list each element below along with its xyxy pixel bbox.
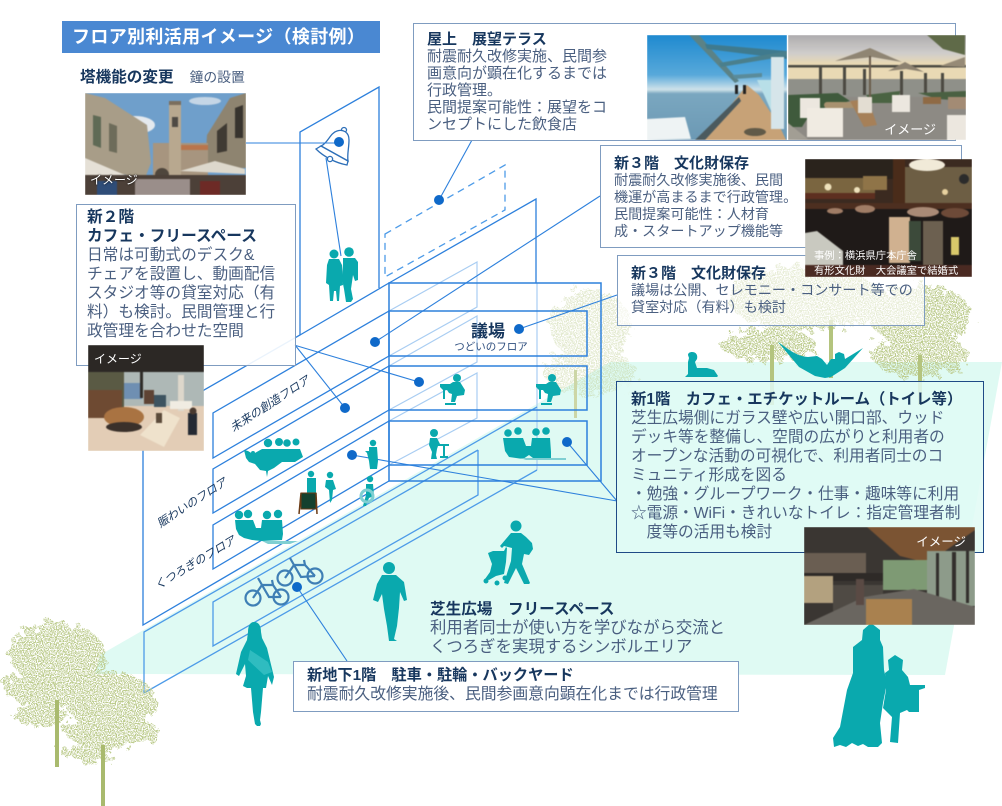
new 2nd floor text: 料）も検討。民間管理と行: [87, 304, 275, 321]
photo caption: イメージ: [90, 173, 138, 187]
assembly hall text: 新３階 文化財保存: [631, 265, 766, 282]
floor name labels: [152, 373, 313, 592]
silhouette: reclining person: [685, 352, 718, 377]
silhouette: person with stroller: [484, 520, 533, 586]
silhouettes: group on relaxing floor: [235, 510, 298, 544]
trees: right side: [544, 266, 972, 418]
new 1st floor text: ミュニティ形成を図る: [631, 467, 787, 484]
rooftop text: 画意向が顕在化するまでは: [427, 65, 607, 82]
panel: rooftop terrace: [413, 23, 956, 141]
lawn plaza text: 利用者同士が使い方を学びながら交流と: [430, 619, 725, 637]
floor name labels: 賑わいのフロア: [155, 475, 231, 530]
new 3rd floor text: [614, 155, 797, 239]
new 1st floor text: 芝生広場側にガラス壁や広い開口部、ウッド: [631, 410, 944, 427]
lawn plaza ground: [95, 362, 1002, 675]
rooftop text: 民間提案可能性：展望をコ: [427, 99, 607, 116]
bell icon: [316, 128, 349, 165]
new 3rd floor text: 機運が高まるまで行政管理。: [614, 189, 797, 205]
photo caption: [814, 250, 958, 276]
panel: new basement 1st floor: [293, 661, 739, 712]
photo caption: イメージ: [916, 535, 966, 549]
floor name labels: 未来の創造フロア: [228, 373, 313, 435]
roof terrace dashed outline: [385, 165, 505, 277]
rooftop text: 行政管理。: [427, 82, 502, 99]
silhouette: walking man: [373, 562, 407, 641]
floor slabs: [213, 311, 389, 569]
new 1st floor text: ☆電源・WiFi・きれいなトイレ：指定管理者制: [631, 505, 960, 522]
silhouette: mother and child with stroller: [833, 623, 925, 747]
new 1st floor text: ・勉強・グループワーク・仕事・趣味等に利用: [631, 486, 959, 503]
panel: new 1st floor cafe: [616, 381, 984, 553]
lawn plaza text: [430, 600, 725, 656]
assembly hall text: [631, 265, 913, 315]
new 1st floor text: 度等の活用も検討: [647, 524, 772, 541]
panel: new 3rd floor assembly hall: [617, 255, 925, 326]
panel: new 2nd floor: [76, 204, 296, 366]
chalkboard sign: [299, 493, 317, 514]
title bar: [62, 21, 380, 53]
basement level outline: [213, 450, 478, 646]
assembly hall label: [454, 322, 528, 353]
basement text: 新地下1階 駐車・駐輪・バックヤード: [307, 667, 574, 684]
silhouettes: group at table lower floor: [503, 427, 566, 460]
new 2nd floor text: [87, 208, 275, 340]
tower function heading: 塔機能の変更 鐘の設置: [80, 69, 245, 86]
new 3rd floor text: 新３階 文化財保存: [614, 155, 749, 172]
silhouette: person in hammock: [778, 342, 863, 378]
new 3rd floor text: 耐震耐久改修実施後、民間: [614, 172, 783, 188]
photo caption: イメージ: [94, 352, 142, 366]
lawn plaza text: 芝生広場 フリースペース: [430, 601, 614, 618]
new 2nd floor text: カフェ・フリースペース: [87, 228, 257, 245]
bicycles: [246, 558, 322, 606]
location dots: [292, 137, 572, 592]
new 1st floor text: [631, 390, 962, 541]
assembly hall text: 議場は公開、セレモニー・コンサート等での: [631, 282, 913, 298]
new 1st floor text: デッキ等を整備し、空間の広がりと利用者の: [631, 429, 945, 446]
rooftop text: 耐震耐久改修実施、民間参: [427, 48, 607, 65]
photo: glass observation deck: [647, 35, 787, 140]
new 1st floor text: オープンな活動の可視化で、利用者同士のコ: [631, 448, 943, 465]
assembly hall text: 貸室対応（有料）も検討: [631, 299, 786, 315]
new 2nd floor text: 新２階: [87, 209, 134, 226]
light back frames: [389, 262, 537, 470]
silhouettes: seated at desks upper floor: [440, 374, 561, 405]
trees: left side: [2, 623, 160, 806]
photo: tower street: [85, 93, 246, 195]
new 2nd floor text: チェアを設置し、動画配信: [87, 266, 275, 283]
floor name labels: くつろぎのフロア: [152, 533, 239, 592]
assembly hall label: 議場: [471, 322, 505, 341]
connector lines: [246, 140, 617, 661]
silhouettes: couple under bell: [326, 247, 358, 302]
photo caption: イメージ: [884, 122, 936, 137]
new 2nd floor text: 日常は可動式のデスク&: [87, 247, 254, 264]
new 2nd floor text: 政管理を合わせた空間: [87, 323, 244, 340]
silhouettes: seated at desk lower floor: [429, 429, 449, 459]
lawn plaza text: くつろぎを実現するシンボルエリア: [430, 638, 692, 656]
basement text: 耐震耐久改修実施後、民間参画意向顕在化までは行政管理: [307, 686, 718, 703]
new 3rd floor text: 成・スタートアップ機能等: [614, 223, 783, 239]
photo caption: 有形文化財 大会議室で結婚式: [814, 266, 958, 276]
title bar: フロア別利活用イメージ（検討例）: [72, 27, 365, 47]
plaza level outline: [144, 407, 537, 693]
front elevation: [389, 283, 601, 481]
new 3rd floor text: 民間提案可能性：人材育: [614, 206, 769, 222]
rooftop text: [427, 31, 607, 133]
basement text: [307, 666, 718, 703]
panel: new 3rd floor cultural asset: [600, 145, 962, 248]
photo: cafe interior: [804, 527, 975, 625]
assembly hall label: つどいのフロア: [454, 341, 528, 353]
silhouettes: waiter, guests and wheelchair: [307, 440, 378, 506]
photo: cafe free space: [88, 345, 204, 451]
rooftop text: ンセプトにした飲食店: [427, 116, 577, 133]
photo: rooftop restaurant: [788, 35, 966, 140]
new 1st floor text: 新1階 カフェ・エチケットルーム（トイレ等）: [631, 391, 962, 408]
photo: wedding in hall: [805, 159, 972, 277]
rooftop text: 屋上 展望テラス: [427, 31, 547, 48]
building outer wall and tower panel: [143, 87, 537, 625]
photo caption: 事例：横浜県庁本庁舎: [814, 251, 917, 262]
silhouette: woman with bag: [236, 622, 274, 726]
new 2nd floor text: スタジオ等の貸室対応（有: [87, 285, 275, 302]
silhouettes: group on bustling floor: [244, 438, 303, 477]
